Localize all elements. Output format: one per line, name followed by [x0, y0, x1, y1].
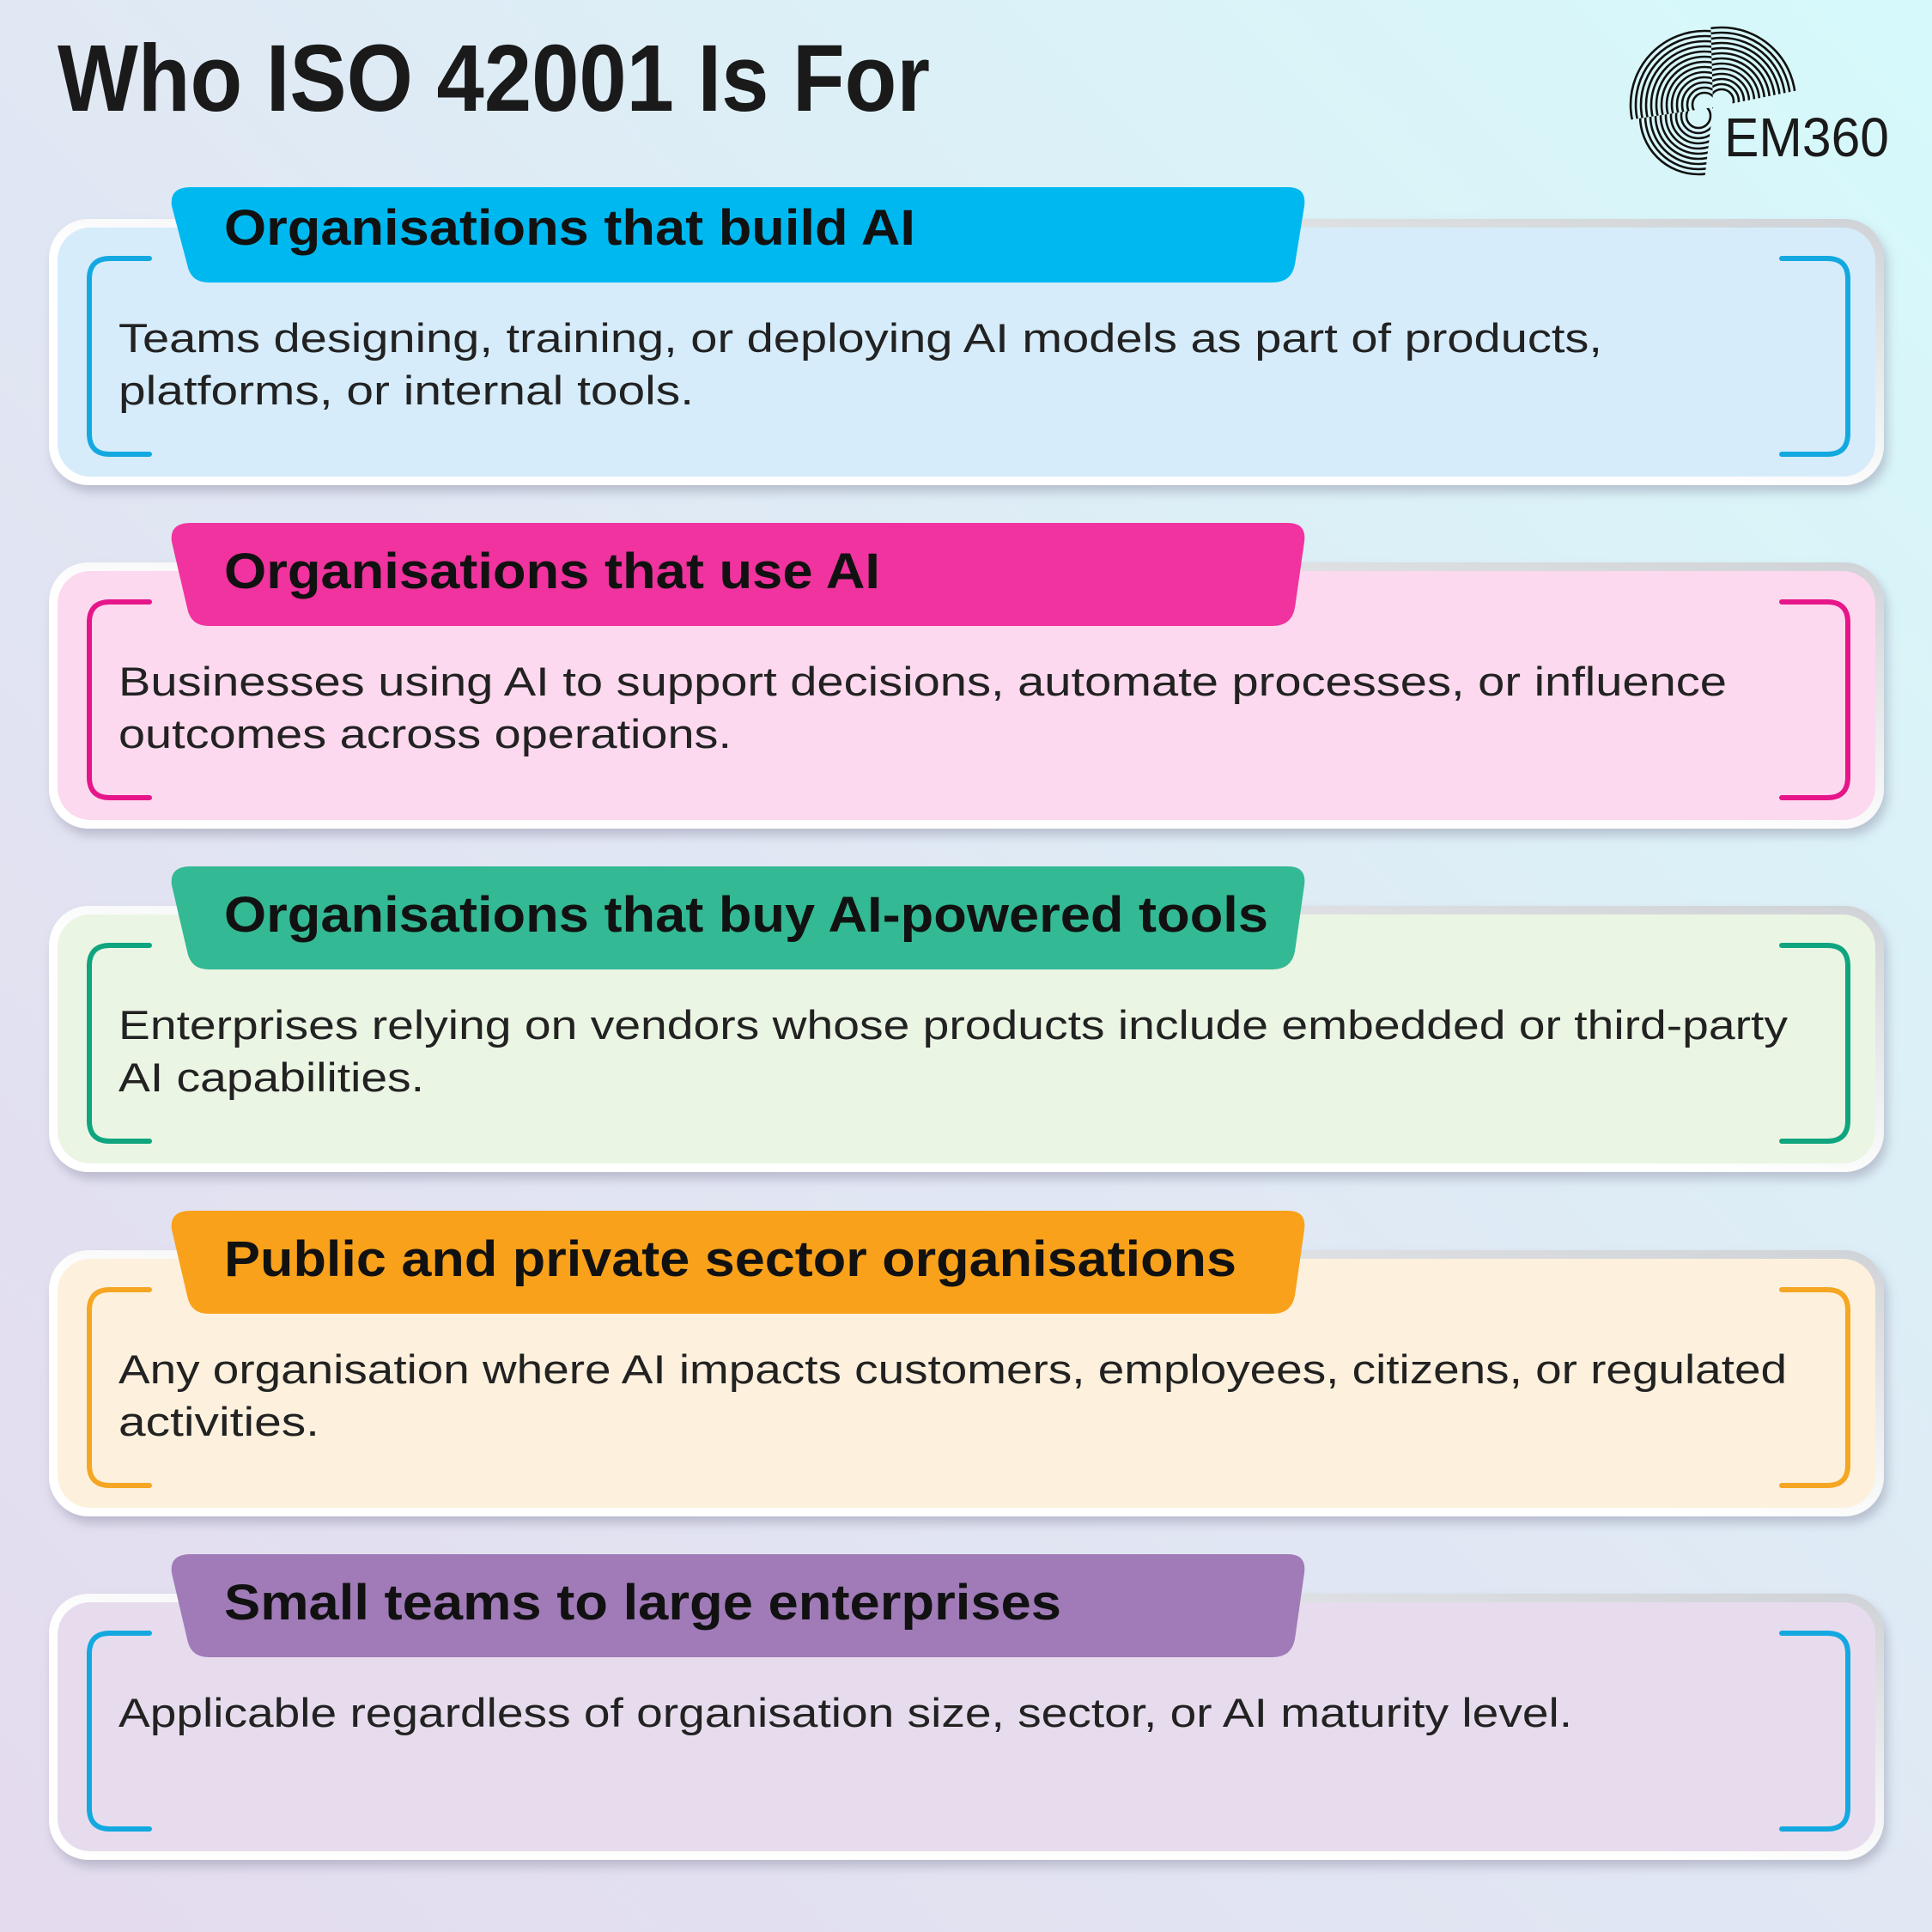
- tab: use AI: [172, 523, 1304, 626]
- tab: build AI: [172, 187, 1304, 283]
- panel: build AI: platforms, or internal tools.: [118, 368, 694, 413]
- panel: buy AI-powered tools: Enterprises relying on vendors whose products include embedded or third-party: [118, 1002, 1789, 1048]
- panel: buy AI-powered tools: [49, 866, 1884, 1172]
- panel: use AI: Businesses using AI to support decisions, automate processes, or influence: [118, 659, 1727, 704]
- panel: build AI: [49, 187, 1884, 485]
- panel: buy AI-powered tools: AI capabilities.: [118, 1054, 424, 1100]
- panel: small to large: [49, 1554, 1884, 1860]
- panel: use AI: [49, 523, 1884, 829]
- panel: public and private: Any organisation where AI impacts customers, employees, citizens, or regulated: [118, 1346, 1787, 1392]
- tab: small to large: [172, 1554, 1304, 1657]
- panel: public and private: [49, 1211, 1884, 1516]
- title: Who ISO 42001 Is For: [58, 26, 930, 131]
- panel: small to large: Applicable regardless of organisation size, sector, or AI maturity level.: [118, 1690, 1572, 1735]
- tab: small to large: Small teams to large enterprises: [224, 1575, 1061, 1631]
- tab: public and private: Public and private sector organisations: [224, 1231, 1236, 1287]
- tab: use AI: Organisations that use AI: [224, 544, 880, 599]
- tab: buy AI-powered tools: Organisations that buy AI-powered tools: [224, 887, 1268, 943]
- panel: use AI: outcomes across operations.: [118, 711, 732, 756]
- tab: public and private: [172, 1211, 1304, 1314]
- tab: build AI: Organisations that build AI: [224, 200, 915, 256]
- tab: buy AI-powered tools: [172, 866, 1304, 969]
- logo: EM360: [1631, 27, 1889, 179]
- panel: public and private: activities.: [118, 1399, 319, 1444]
- logo: EM360: EM360: [1724, 106, 1889, 168]
- panel: build AI: Teams designing, training, or deploying AI models as part of products,: [118, 315, 1602, 361]
